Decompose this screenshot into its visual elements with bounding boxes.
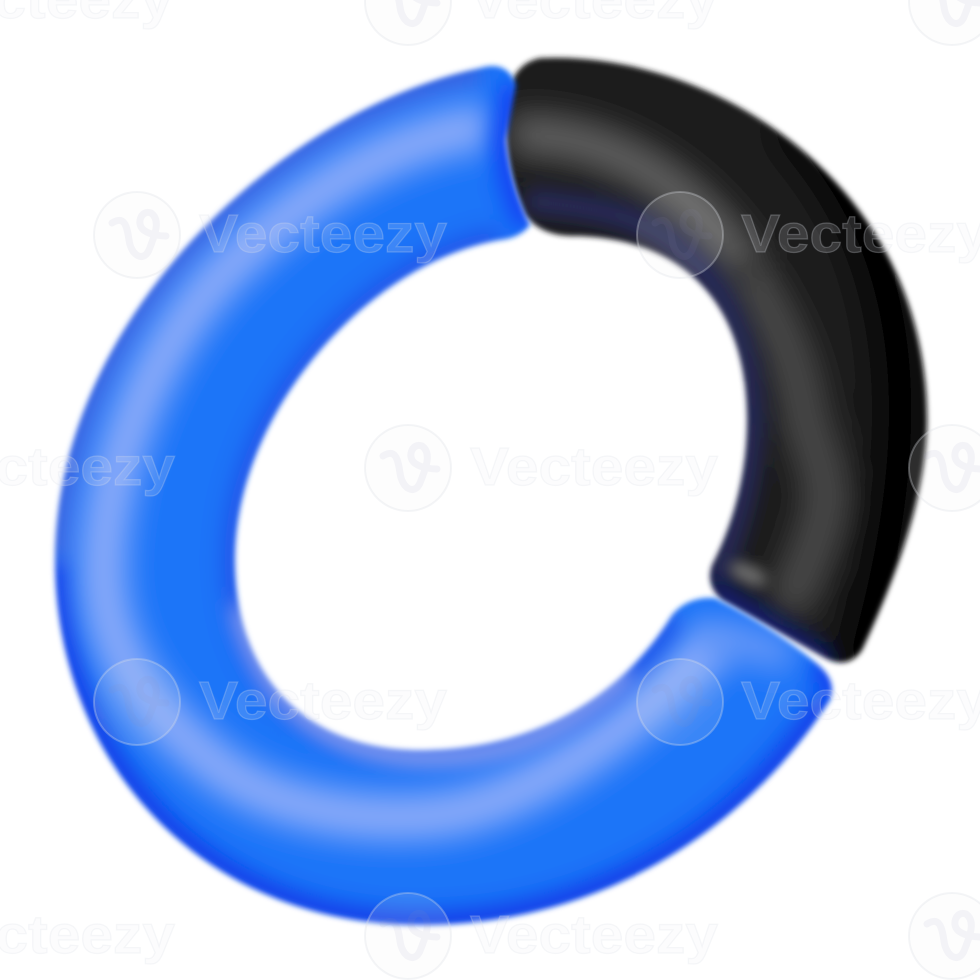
donut chart: [55, 58, 927, 925]
watermark: vecteezy tiled: Vecteezy: [741, 204, 980, 264]
black segment: [505, 58, 927, 665]
blue segment: [55, 66, 832, 925]
watermark: vecteezy tiled: Vecteezy: [199, 671, 447, 731]
watermark: vecteezy tiled: Vecteezy: [199, 204, 447, 264]
watermark: vecteezy tiled: Vecteezy: [741, 671, 980, 731]
watermark: vecteezy tiled: Vecteezy: [470, 437, 718, 497]
watermark: vecteezy tiled: Vecteezy: [470, 905, 718, 965]
